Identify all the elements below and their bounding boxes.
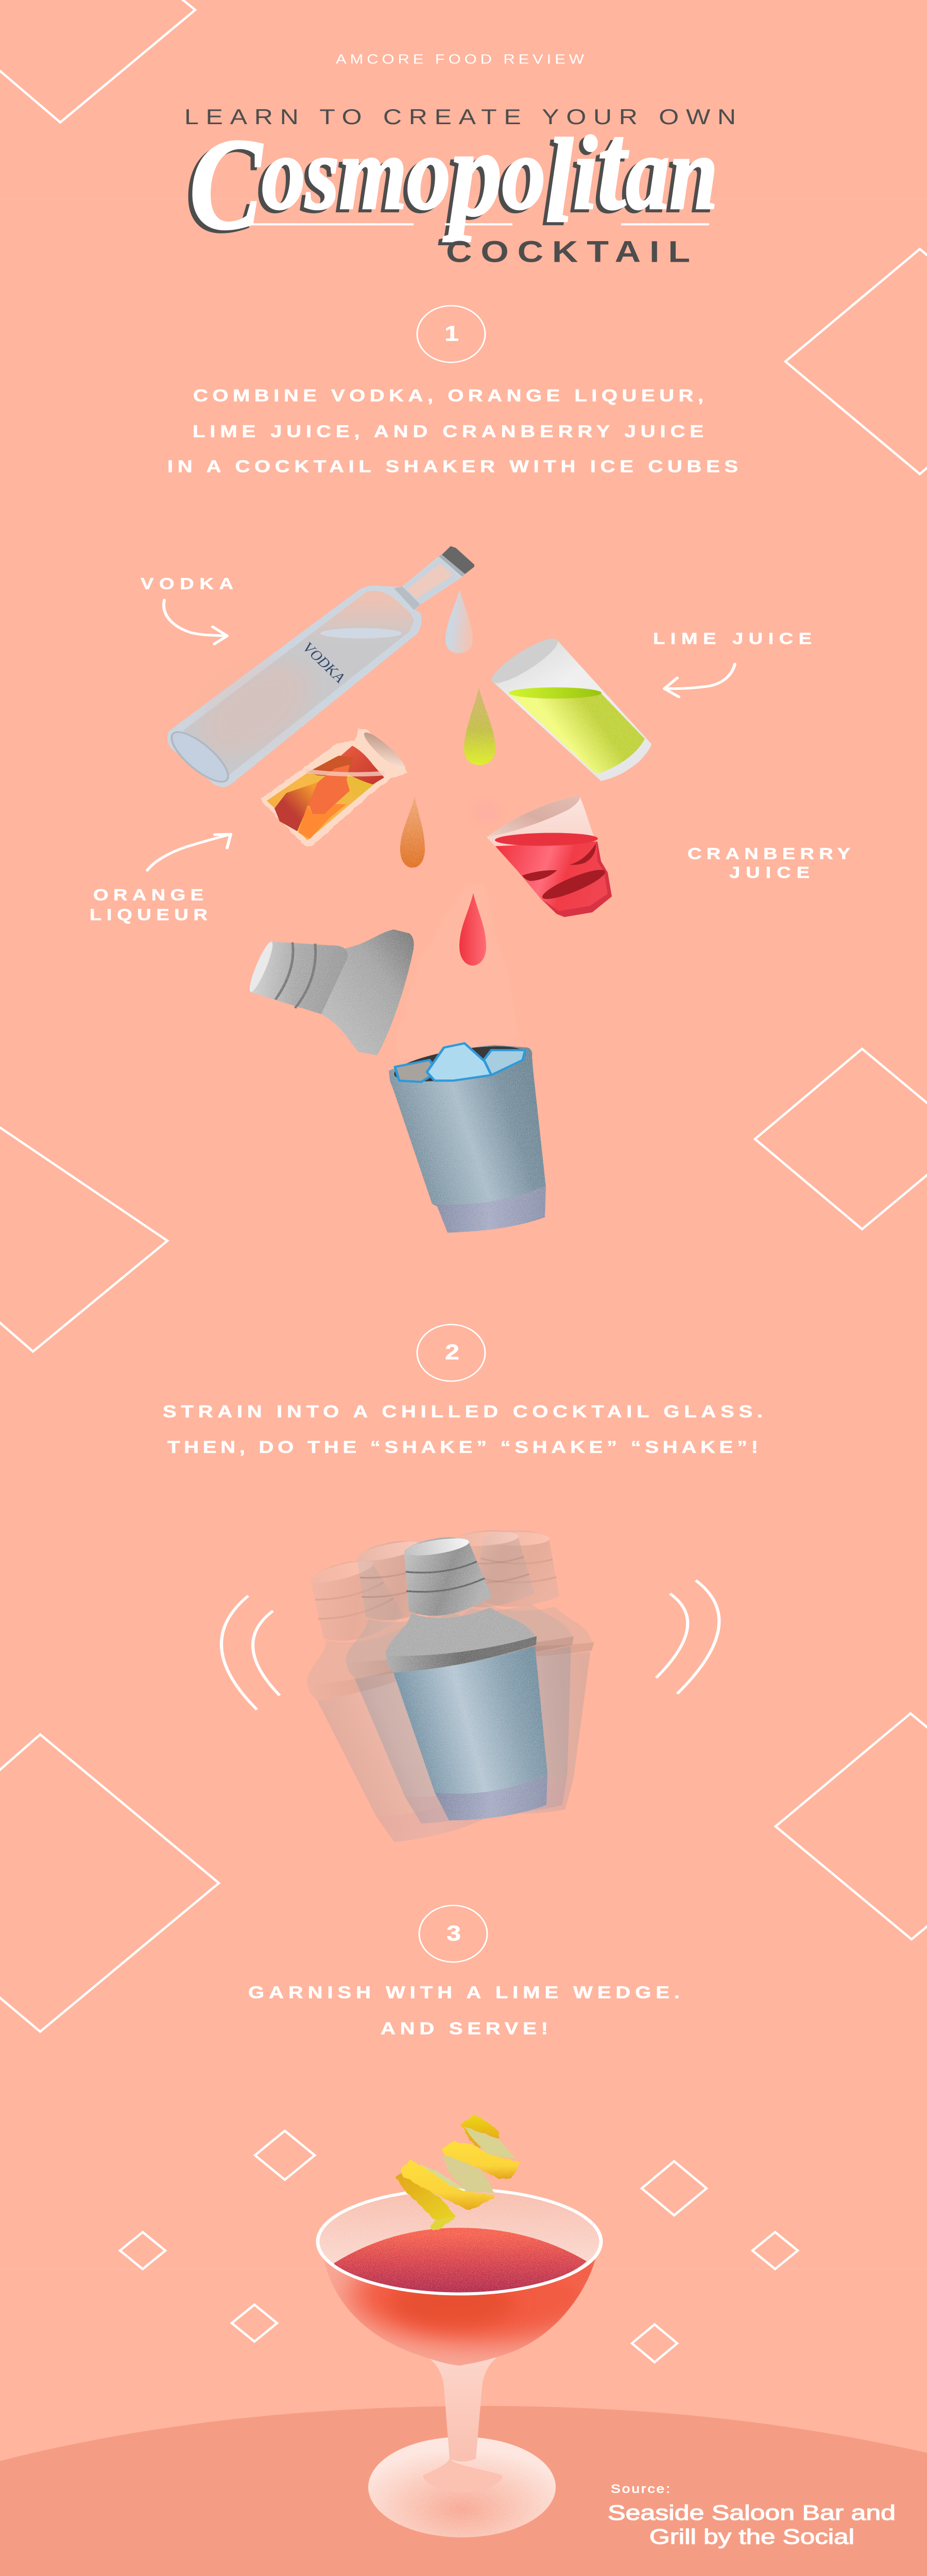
drop: orange — [400, 796, 425, 868]
illustration: orange liqueur jar — [260, 728, 409, 846]
script title: C — [190, 112, 263, 257]
step 3 instructions: GARNISH WITH A LIME WEDGE. — [248, 1982, 680, 2002]
pale pith lower — [442, 2155, 494, 2193]
glass rim — [486, 633, 564, 689]
step 3 number — [419, 1905, 487, 1962]
glass inner rim — [487, 795, 580, 837]
illustration: cocktail glass — [309, 2185, 618, 2537]
top opening — [246, 940, 277, 993]
label: orange liqueur: LIQUEUR — [90, 906, 208, 924]
motion arcs: shake — [221, 1581, 719, 1709]
peel back lower — [396, 2173, 456, 2220]
bottle neck — [402, 558, 459, 604]
slice: big left — [274, 782, 318, 831]
script title: p — [443, 104, 502, 242]
bottle label text: VODKA — [298, 640, 349, 686]
lime juice body — [509, 694, 645, 773]
bottle glass shell — [168, 557, 462, 787]
bottle interior — [183, 591, 414, 774]
main shaker — [386, 1535, 547, 1820]
liquid surface — [320, 628, 402, 638]
title line: learn to create your own: LEARN TO CREATE YOUR OWN — [184, 105, 736, 129]
cup opening — [391, 1039, 529, 1089]
glass inner — [318, 2189, 601, 2294]
cup base — [432, 1186, 546, 1232]
jar glass — [260, 728, 407, 846]
drop: lime — [464, 688, 495, 765]
glass body — [493, 640, 651, 781]
script title: osmo — [262, 114, 451, 231]
script title shadow: o — [498, 117, 541, 234]
cranberry dark facets — [522, 844, 609, 904]
step 1 instructions — [167, 386, 738, 476]
steam — [396, 885, 518, 1060]
drop: vodka — [445, 589, 473, 653]
bottle peach haze — [179, 645, 331, 772]
ghost shaker right — [401, 1522, 597, 1820]
step 1 instructions: IN A COCKTAIL SHAKER WITH ICE CUBES — [167, 457, 738, 476]
label: orange liqueur — [90, 886, 208, 924]
label: cranberry juice: CRANBERRY — [688, 844, 850, 863]
sparkle diamonds — [120, 2131, 798, 2362]
jar opening — [360, 729, 409, 774]
script title shadow: p — [439, 107, 498, 245]
script title shadow: i — [569, 117, 593, 234]
illustration: shaker cup with ice — [389, 1039, 546, 1232]
peel front — [401, 2160, 494, 2211]
label: orange liqueur: ORANGE — [93, 886, 203, 904]
label: lime juice: LIME JUICE — [653, 630, 812, 648]
peel top dark — [460, 2114, 500, 2148]
title line: cocktail: COCKTAIL — [446, 235, 690, 268]
drop: cranberry — [459, 893, 486, 965]
peel tail — [430, 2216, 456, 2231]
script title: tan — [597, 97, 718, 235]
publisher name: AMCORE FOOD REVIEW — [336, 52, 584, 67]
script title shadow: l — [541, 117, 569, 250]
bowl — [324, 2259, 596, 2366]
neck interior — [407, 563, 453, 599]
top neck — [252, 942, 348, 1014]
step 2 number — [417, 1325, 485, 1381]
step 2 instructions — [163, 1402, 763, 1456]
bottle collar — [394, 586, 420, 610]
slice: top red — [339, 746, 384, 784]
title underlines — [250, 223, 709, 226]
peel middle — [442, 2142, 521, 2179]
drink surface — [334, 2228, 587, 2294]
stem — [428, 2358, 496, 2462]
step 3 instructions — [248, 1982, 680, 2038]
step 2 instructions: THEN, DO THE “SHAKE” “SHAKE” “SHAKE”! — [167, 1437, 758, 1456]
glass rim — [318, 2189, 601, 2294]
slice: dark orange — [307, 756, 353, 776]
faint splash — [473, 801, 500, 823]
step 1 number: 1 — [444, 321, 459, 346]
source credit: Grill by the Social — [649, 2524, 854, 2549]
neck lip — [439, 555, 465, 577]
illustration: shaker top — [246, 929, 414, 1055]
step 1 number — [417, 306, 485, 362]
title block — [184, 97, 736, 268]
source credit: Source: — [611, 2482, 670, 2496]
illustration: cranberry juice glass — [473, 795, 612, 917]
bottle base — [163, 725, 236, 788]
cranberry body — [495, 841, 612, 917]
foot cone — [423, 2458, 503, 2493]
script title: i — [573, 114, 597, 231]
illustration: lime juice glass — [486, 633, 651, 781]
top cone — [321, 929, 414, 1055]
step 1 instructions: COMBINE VODKA, ORANGE LIQUEUR, — [193, 386, 703, 405]
illustration: lemon twist garnish — [396, 2114, 521, 2231]
ghost shaker left — [337, 1534, 519, 1827]
arrow: vodka — [164, 600, 227, 644]
step 3 number: 3 — [447, 1921, 461, 1945]
script title shadow: C — [185, 115, 259, 260]
label: vodka: VODKA — [141, 574, 233, 593]
slice: center strip — [308, 765, 350, 814]
step 3 instructions: AND SERVE! — [381, 2019, 548, 2038]
step 2 instructions: STRAIN INTO A CHILLED COCKTAIL GLASS. — [163, 1402, 763, 1421]
jar liquid — [267, 756, 384, 840]
step 2 number: 2 — [445, 1340, 459, 1364]
ghost shaker far left — [289, 1549, 492, 1849]
top rings — [276, 942, 316, 1008]
script title: l — [545, 114, 573, 247]
arrow: orange liqueur — [147, 834, 231, 870]
label: cranberry juice — [688, 844, 850, 882]
glass upper — [487, 795, 597, 846]
bottle cap — [442, 546, 474, 574]
source credit: Seaside Saloon Bar and — [608, 2501, 896, 2524]
slice: lower orange — [298, 804, 347, 839]
cup body — [389, 1045, 546, 1205]
ice cubes — [395, 1043, 525, 1082]
background diamond outlines — [0, 0, 927, 2031]
table — [0, 2406, 927, 2576]
script title: o — [502, 114, 545, 231]
source credit — [608, 2482, 896, 2549]
illustration: vodka bottle — [163, 546, 474, 788]
ghost shaker far right — [404, 1519, 628, 1825]
glass foot — [368, 2437, 556, 2537]
arrow: lime juice — [664, 664, 735, 697]
label: cranberry juice: JUICE — [729, 863, 810, 882]
cranberry body light — [495, 841, 608, 911]
jar band — [306, 771, 385, 774]
script title shadow: osmo — [258, 117, 447, 234]
step 1 instructions: LIME JUICE, AND CRANBERRY JUICE — [193, 421, 703, 441]
pale pith back — [420, 2164, 466, 2190]
script title shadow: tan — [593, 100, 714, 238]
cranberry surface — [495, 832, 598, 846]
pale pith upper — [464, 2127, 516, 2159]
illustration: shaking shaker — [289, 1519, 628, 1849]
lime juice surface — [509, 687, 602, 699]
